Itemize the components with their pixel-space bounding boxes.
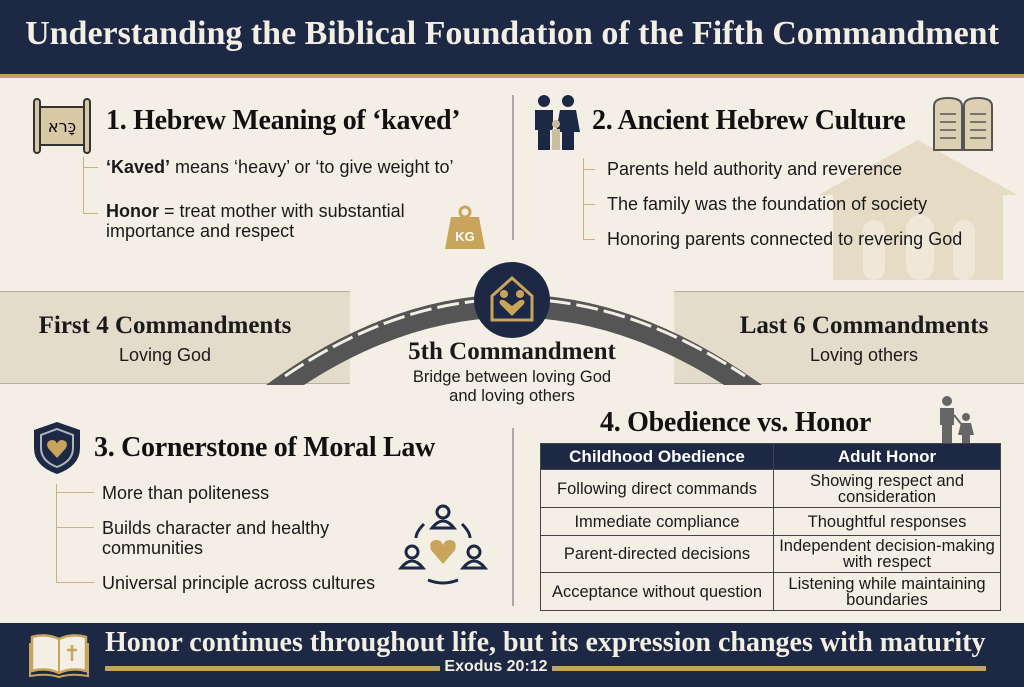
center text: 5th commandment: [408, 338, 616, 405]
comparison table: Parent-directed decisions: [564, 545, 750, 563]
comparison table: Acceptance without question: [552, 582, 762, 600]
comparison table: Independent decision-making: [779, 537, 995, 555]
band: first 4 commandments: Loving God: [119, 345, 211, 365]
bullets 3: communities: [102, 538, 203, 558]
heading 2: 2. Ancient Hebrew Culture: [592, 105, 905, 136]
footer banner: [0, 623, 1024, 687]
bullets 3: Builds character and healthy: [102, 518, 329, 538]
comparison table: consideration: [838, 488, 936, 506]
bullets 2: [583, 158, 962, 249]
title bar: [0, 0, 1024, 78]
bullets 1: Honor = treat mother with substantial: [106, 201, 405, 221]
bullets 1: [83, 157, 454, 241]
divider top: [512, 95, 514, 240]
bullets 2: The family was the foundation of society: [607, 194, 927, 214]
bullets 1: importance and respect: [106, 221, 294, 241]
heading 1: 1. Hebrew Meaning of ‘kaved’: [106, 105, 460, 136]
icon: tablets: [933, 97, 993, 151]
bridge: [266, 296, 762, 385]
icon: KG weight: KG: [455, 229, 475, 244]
band: last 6 commandments: [674, 291, 1024, 384]
band: last 6 commandments: Last 6 Commandments: [740, 312, 988, 339]
bullets 3: More than politeness: [102, 483, 269, 503]
comparison table: boundaries: [846, 590, 928, 608]
center text: 5th commandment: and loving others: [449, 387, 575, 405]
bullets 2: Parents held authority and reverence: [607, 159, 902, 179]
center text: 5th commandment: Bridge between loving God: [413, 368, 611, 386]
reference: Exodus: Exodus 20:12: [444, 658, 548, 675]
comparison table: [540, 443, 1001, 611]
icon: parent and child: [940, 396, 974, 443]
footer quote: Honor continues throughout life, but its expression changes with maturity: [105, 627, 986, 658]
heading 4: 4. Obedience vs. Honor: [600, 407, 871, 438]
icon: scroll: כָּרא: [48, 117, 76, 136]
comparison table: with respect: [843, 553, 931, 571]
icon: KG weight: [445, 206, 485, 249]
icon: open bible: [29, 634, 89, 678]
comparison table: Following direct commands: [557, 480, 757, 498]
comparison table: Immediate compliance: [574, 512, 740, 530]
comparison table: Adult Honor: [838, 446, 936, 466]
panel 1: Hebrew meaning: [33, 98, 485, 249]
band: first 4 commandments: [0, 291, 350, 384]
band: last 6 commandments: Loving others: [810, 345, 918, 365]
bullets 1: ‘Kaved’ means ‘heavy’ or ‘to give weight to’: [106, 157, 454, 177]
comparison table: Showing respect and: [810, 472, 964, 490]
divider bottom: [512, 428, 514, 606]
icon: house heart: [474, 262, 550, 338]
bullets 3: [56, 483, 375, 593]
panel 4: Obedience vs Honor: [540, 396, 1001, 611]
panel 3: Cornerstone: [34, 422, 488, 593]
icon: family: [535, 95, 580, 150]
panel 2: Ancient Hebrew culture: [535, 95, 1018, 280]
heading 3: 3. Cornerstone of Moral Law: [94, 432, 435, 463]
comparison table: Childhood Obedience: [569, 446, 745, 466]
background building: [818, 140, 1018, 280]
center text: 5th commandment: 5th Commandment: [408, 338, 616, 365]
title: Understanding the Biblical Foundation of the Fifth Commandment: [25, 15, 999, 52]
bullets 3: Universal principle across cultures: [102, 573, 375, 593]
comparison table: Thoughtful responses: [808, 512, 966, 530]
comparison table: Listening while maintaining: [788, 574, 986, 592]
band: first 4 commandments: First 4 Commandments: [39, 312, 291, 339]
icon: scroll: [33, 98, 91, 154]
icon: community heart: [398, 504, 488, 584]
icon: shield heart: [34, 422, 80, 474]
bullets 2: Honoring parents connected to revering God: [607, 229, 962, 249]
